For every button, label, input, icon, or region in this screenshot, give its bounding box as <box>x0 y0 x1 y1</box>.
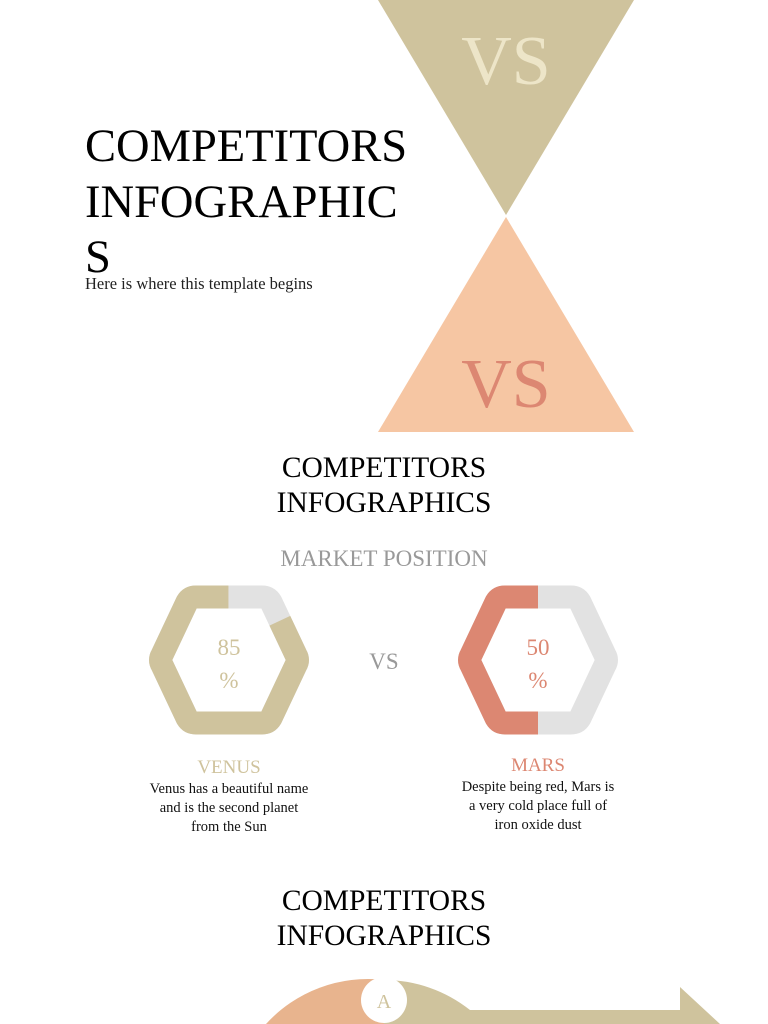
title: INFOGRAPHIC <box>85 177 398 228</box>
chart: venus hexagon 85%: % <box>219 668 239 693</box>
chart: venus hexagon 85% <box>160 597 298 723</box>
market position heading: MARKET POSITION <box>280 546 488 571</box>
icon: top inverted triangle with VS: VS <box>461 23 551 100</box>
section heading 1: COMPETITORS <box>282 452 486 484</box>
text block: mars: MARS <box>511 755 565 776</box>
icon: top inverted triangle with VS <box>378 0 634 215</box>
title: COMPETITORS <box>85 121 407 172</box>
chart: venus hexagon 85%: 85 <box>218 635 240 660</box>
chart: mars hexagon 50%: 50 <box>526 635 550 660</box>
text block: mars <box>462 755 615 833</box>
text block: mars: Despite being red, Mars is <box>462 779 615 795</box>
diagram: A circle with arrow: A <box>377 991 392 1013</box>
chart: mars hexagon 50% <box>470 597 606 723</box>
vs label: VS <box>369 649 399 674</box>
text block: venus: and is the second planet <box>160 800 298 816</box>
section heading 2: COMPETITORS <box>282 885 486 917</box>
text block: venus: from the Sun <box>191 819 268 835</box>
icon: bottom triangle with VS <box>378 217 634 432</box>
title: S <box>85 232 111 283</box>
section heading 1: INFOGRAPHICS <box>277 487 491 519</box>
text block: mars: a very cold place full of <box>469 798 607 814</box>
subtitle: Here is where this template begins <box>85 274 313 293</box>
text block: venus: VENUS <box>197 757 261 778</box>
text block: venus <box>150 757 308 835</box>
section heading 2: INFOGRAPHICS <box>277 920 491 952</box>
diagram: A circle with arrow <box>266 977 720 1024</box>
chart: mars hexagon 50%: % <box>528 668 548 693</box>
text block: venus: Venus has a beautiful name <box>150 781 308 797</box>
text block: mars: iron oxide dust <box>494 817 582 833</box>
icon: bottom triangle with VS: VS <box>461 346 551 423</box>
